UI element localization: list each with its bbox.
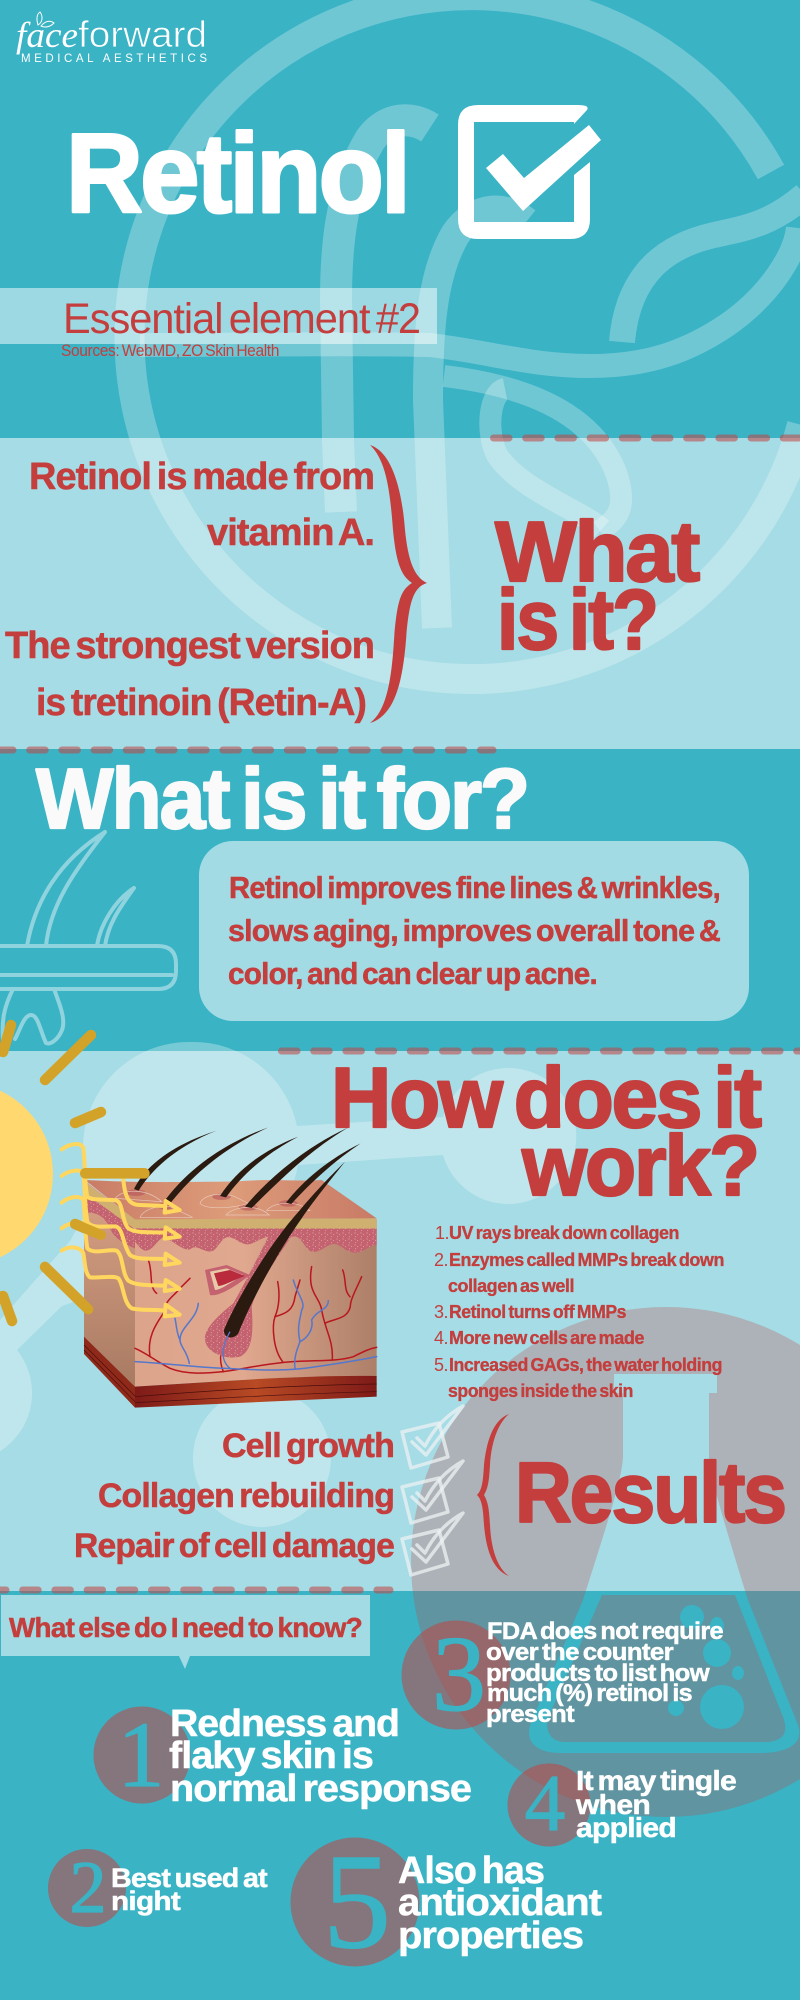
fact 4: It may tingle bbox=[576, 1765, 736, 1796]
numbered list: collagen as well bbox=[448, 1276, 574, 1296]
banner strip bbox=[0, 288, 437, 344]
fact 1: flaky skin is bbox=[169, 1735, 373, 1777]
icon: hair outline bbox=[0, 832, 176, 1050]
heading: how does it work: How does it bbox=[331, 1051, 762, 1146]
panel: what is it text: Retinol is made from bbox=[29, 456, 374, 498]
fact 3: FDA does not require bbox=[487, 1618, 723, 1645]
numbered list: UV rays break down collagen bbox=[449, 1223, 679, 1243]
fact 4: applied bbox=[576, 1812, 676, 1843]
callout: what else bbox=[1, 1595, 370, 1669]
fact 3: over the counter bbox=[486, 1639, 673, 1666]
panel: what is it text: The strongest version bbox=[5, 625, 374, 667]
icon: checkbox bbox=[458, 105, 601, 239]
fact 2: night bbox=[111, 1886, 181, 1916]
heading: results: Results bbox=[515, 1446, 785, 1541]
panel: what is it band bbox=[0, 438, 800, 749]
numbered list: 2. bbox=[434, 1250, 448, 1270]
fact 5: 5 bbox=[323, 1827, 391, 1977]
icon: left brace bbox=[477, 1414, 509, 1576]
numbered list: 3. bbox=[434, 1302, 448, 1322]
numbered list: Increased GAGs, the water holding bbox=[449, 1355, 722, 1375]
light molecule shapes bbox=[0, 1042, 576, 1527]
numbered list: 5. bbox=[434, 1355, 448, 1375]
icon: right brace bbox=[370, 445, 427, 723]
panel: how does it work band bbox=[0, 1051, 800, 1591]
hairs bbox=[134, 1127, 361, 1337]
subtitle: Essential element #2 bbox=[63, 295, 420, 343]
panel: what is it for bbox=[199, 841, 749, 1021]
sources: Sources: WebMD, ZO Skin Health bbox=[61, 341, 279, 360]
heading: what is it bbox=[495, 505, 700, 668]
fact 4 bbox=[508, 1758, 736, 1848]
heading: what is it for: What is it for? bbox=[36, 752, 528, 847]
panel: what is it text: vitamin A. bbox=[207, 512, 374, 554]
fact 3: 3 bbox=[432, 1615, 486, 1734]
title: Retinol bbox=[66, 111, 408, 236]
results list bbox=[74, 1427, 394, 1565]
blood vessels bbox=[135, 1260, 377, 1373]
heading: what is it: is it? bbox=[497, 573, 657, 668]
panel: what is it for: slows aging, improves overall tone & bbox=[228, 913, 720, 948]
numbered list: sponges inside the skin bbox=[448, 1381, 633, 1401]
fact 3: products to list how bbox=[486, 1660, 710, 1687]
results list: Collagen rebuilding bbox=[98, 1477, 394, 1515]
panel: what is it for: Retinol improves fine lines & wrinkles, bbox=[229, 870, 720, 905]
fact 1: Redness and bbox=[170, 1703, 399, 1745]
panel: what is it text: is tretinoin (Retin-A) bbox=[36, 682, 366, 724]
follicle openings bbox=[115, 1189, 310, 1217]
icons: hand-drawn checkboxes bbox=[402, 1406, 463, 1575]
gold bar bbox=[85, 1157, 144, 1189]
numbered list: More new cells are made bbox=[449, 1328, 644, 1348]
fact 5: Also has bbox=[398, 1850, 544, 1892]
heading: how does it work bbox=[331, 1051, 762, 1214]
fact 3: present bbox=[486, 1701, 575, 1728]
fact 4: 4 bbox=[525, 1758, 565, 1848]
fact 1: normal response bbox=[170, 1768, 471, 1810]
panel: what is it for: color, and can clear up acne. bbox=[228, 956, 597, 991]
logo: face bbox=[16, 15, 78, 55]
numbered list: 4. bbox=[434, 1328, 448, 1348]
logo: MEDICAL AESTHETICS bbox=[21, 53, 207, 65]
hair follicle bbox=[205, 1233, 293, 1358]
results list: Repair of cell damage bbox=[74, 1527, 394, 1565]
fact 3: much (%) retinol is bbox=[487, 1680, 692, 1707]
numbered list: Enzymes called MMPs break down bbox=[449, 1250, 724, 1270]
heading: what is it: What bbox=[495, 505, 700, 600]
logo: forward bbox=[78, 14, 207, 55]
fact 1: 1 bbox=[118, 1704, 164, 1807]
divider: dashed lines bbox=[0, 438, 800, 1590]
panel: what is it text bbox=[5, 456, 374, 724]
flask watermark bbox=[411, 1307, 800, 1817]
fact 5: properties bbox=[398, 1915, 583, 1957]
fact 5: antioxidant bbox=[398, 1882, 602, 1924]
results list: Cell growth bbox=[222, 1427, 394, 1465]
callout: what else: What else do I need to know? bbox=[9, 1612, 362, 1643]
numbered list: Retinol turns off MMPs bbox=[449, 1302, 626, 1322]
logo bbox=[16, 12, 207, 65]
fact 2 bbox=[48, 1847, 268, 1929]
fact 2: Best used at bbox=[111, 1863, 268, 1893]
skin layers bbox=[86, 1183, 377, 1253]
fact 3 bbox=[402, 1615, 723, 1734]
fact 1 bbox=[94, 1703, 471, 1810]
UV rays bbox=[62, 1144, 180, 1316]
background logo watermark bbox=[129, 0, 800, 679]
fact 2: 2 bbox=[70, 1847, 106, 1929]
fact 4: when bbox=[575, 1789, 650, 1820]
fact 5 bbox=[290, 1827, 602, 1977]
illustration: skin cross-section bbox=[45, 1127, 377, 1408]
icon: sun bbox=[0, 1025, 101, 1321]
heading: how does it work: work? bbox=[521, 1119, 758, 1214]
numbered list bbox=[434, 1223, 724, 1401]
numbered list: 1. bbox=[435, 1223, 449, 1243]
